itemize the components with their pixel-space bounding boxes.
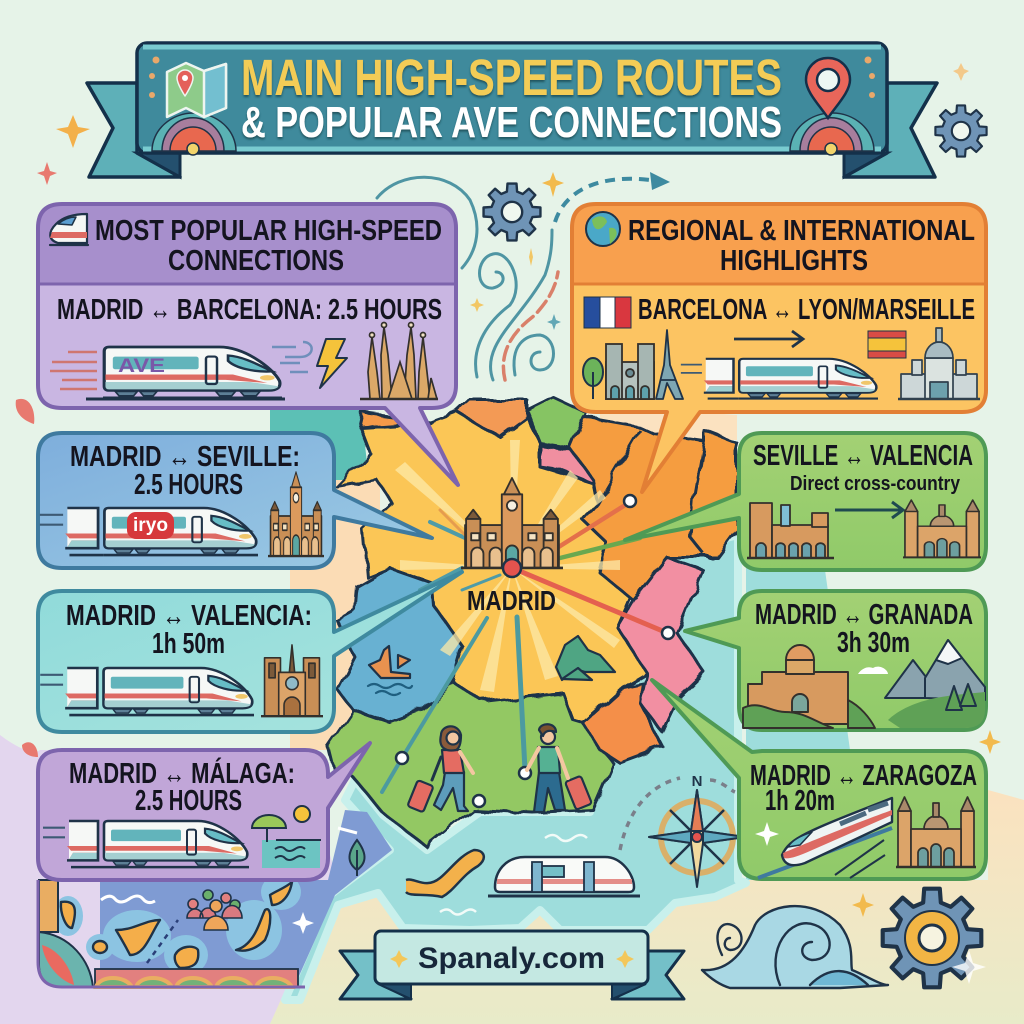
icon: Alhambra — [743, 645, 875, 728]
region: southern green — [328, 682, 613, 847]
train — [43, 821, 249, 867]
small swirl stars — [470, 248, 533, 312]
gear body — [883, 889, 981, 987]
decorative star small — [37, 162, 57, 185]
map hills icon — [556, 636, 615, 680]
train — [40, 668, 254, 715]
sparkle — [952, 950, 986, 984]
icon: mountains — [885, 640, 985, 728]
decorative star left — [56, 115, 90, 148]
icon: flag of France — [584, 297, 631, 328]
region: north-west — [360, 413, 430, 427]
route text: MADRID ↔ SEVILLE: — [70, 441, 300, 473]
tile column — [39, 880, 58, 932]
banner dots — [149, 56, 875, 98]
tree icon — [349, 840, 365, 876]
Madrid landmark — [461, 478, 563, 568]
heading line two: CONNECTIONS — [168, 245, 344, 277]
speed lines — [50, 352, 97, 389]
small star right edge — [979, 730, 1001, 754]
PANEL: regional and international highlights — [572, 204, 986, 492]
corner flower right — [790, 113, 874, 155]
duration: 3h 30m — [837, 627, 910, 659]
region: internal boundaries — [597, 430, 705, 555]
panel body with tail — [652, 680, 986, 879]
PANEL: Madrid to Valencia — [38, 572, 462, 732]
duration: 1h 50m — [152, 628, 225, 660]
corner flower left — [152, 113, 236, 155]
left ribbon tail — [87, 83, 180, 177]
Canary islands with halos — [53, 874, 301, 975]
icon: location pin — [806, 58, 850, 118]
traveller man with suitcase — [527, 724, 592, 812]
icon: domed hall — [898, 328, 980, 399]
route lines — [382, 495, 674, 807]
region: pink Rioja — [540, 445, 600, 483]
BOTTOM BANNER — [340, 931, 684, 999]
PANEL: Madrid to Granada — [685, 591, 986, 730]
wave marks — [440, 835, 587, 914]
decorative star centre — [542, 172, 564, 197]
duration: 2.5 HOURS — [134, 469, 243, 501]
sparkles — [390, 950, 634, 968]
icon: cloud — [858, 667, 888, 674]
iryo badge — [127, 512, 174, 539]
title line two: & POPULAR AVE CONNECTIONS — [241, 98, 782, 147]
Madrid marker — [503, 559, 521, 577]
traveller woman with suitcase — [407, 726, 473, 812]
region: large orange north-east — [570, 417, 737, 600]
icon: castle — [747, 503, 834, 558]
icon: Valencia cathedral — [261, 645, 323, 716]
map boat icon — [368, 646, 412, 695]
banner light trim — [143, 47, 881, 149]
hub — [919, 925, 945, 951]
region: central yellow — [337, 412, 647, 723]
region: western blue — [337, 568, 463, 723]
right ribbon tail — [844, 83, 937, 177]
decorative swirls — [377, 177, 558, 380]
AVE rail — [86, 398, 285, 400]
sparkle — [755, 822, 779, 846]
icon: folded map — [167, 63, 226, 117]
panel divider — [40, 282, 454, 286]
wind lines — [272, 342, 312, 372]
decorative gear top right — [935, 105, 987, 157]
icon: Seville tower — [268, 472, 324, 556]
corner flower — [39, 932, 93, 987]
banner body — [137, 43, 887, 153]
panel body with tail — [685, 591, 986, 730]
panel body with tail — [38, 743, 370, 880]
dashed curved arrow — [555, 172, 670, 222]
flower petals — [42, 945, 74, 985]
icon: Zaragoza basilica — [896, 797, 976, 867]
icon: basilica — [903, 500, 981, 557]
icon: lightning — [317, 339, 347, 388]
title line one: MAIN HIGH-SPEED ROUTES — [241, 49, 782, 106]
sea around the peninsula — [100, 535, 746, 1000]
arrow — [734, 331, 803, 347]
route text: MADRID ↔ VALENCIA: — [66, 600, 312, 632]
compass rose — [649, 773, 745, 887]
panel body with tail — [625, 433, 986, 570]
small star above wave — [852, 893, 874, 917]
panel body with tail — [572, 204, 986, 492]
tile strip with arches — [95, 969, 298, 987]
PANEL: most popular connections — [38, 204, 458, 485]
region: pink Valencia — [617, 557, 705, 733]
island near the coast — [406, 850, 484, 897]
region: basque green — [527, 397, 587, 448]
panel body with tail — [38, 572, 462, 732]
site name: Spanaly.com — [418, 942, 605, 975]
region: orange Murcia — [583, 683, 663, 763]
folds — [137, 153, 887, 177]
icon: tree — [583, 358, 603, 399]
route text: MADRID ↔ MÁLAGA: — [69, 758, 295, 790]
sparkle in the sea — [292, 912, 314, 934]
PANEL: Seville to Valencia — [625, 433, 986, 570]
heading line two: HIGHLIGHTS — [720, 245, 868, 277]
heading: MOST POPULAR HIGH-SPEED — [95, 215, 442, 247]
decorative star right — [953, 63, 969, 81]
bottom decorative wave — [702, 906, 888, 988]
right ribbon — [612, 951, 684, 999]
PANEL: Madrid to Seville — [38, 433, 432, 568]
lower-left tile frame — [38, 880, 305, 987]
Canary sea marks — [101, 828, 357, 963]
sun rays over Madrid — [395, 440, 620, 692]
icon: Eiffel Tower — [656, 330, 683, 399]
crowd icon — [187, 890, 242, 930]
left ribbon — [340, 951, 411, 999]
icon: beach and sun — [252, 806, 321, 868]
train — [40, 508, 258, 555]
duration: 2.5 HOURS — [135, 785, 242, 817]
small teal star — [547, 314, 561, 330]
map of Spain — [328, 397, 737, 847]
icon: small train — [50, 214, 88, 245]
region: north coast orange — [457, 400, 527, 437]
duration: 1h 20m — [765, 785, 835, 817]
panel divider — [574, 282, 984, 286]
folds — [378, 984, 646, 999]
iryo badge: iryo — [133, 515, 168, 536]
icon: flag of Spain — [868, 331, 906, 358]
arrow — [835, 502, 903, 518]
subtitle: Direct cross-country — [790, 473, 961, 495]
gold ring — [905, 911, 959, 965]
dashed map route — [620, 778, 735, 850]
bottom sea train icon — [488, 857, 640, 896]
decorative leaves at the left edge — [16, 399, 38, 757]
AVE train — [103, 347, 282, 398]
panel body with tail — [38, 204, 458, 485]
panel body with tail — [38, 433, 432, 568]
bottom decorative gear — [883, 889, 986, 987]
compass rose: N — [692, 773, 702, 790]
frame stroke — [38, 880, 305, 987]
route text: MADRID ↔ BARCELONA: 2.5 HOURS — [57, 294, 442, 326]
icon: Notre-Dame — [606, 344, 654, 399]
train — [681, 359, 878, 399]
icon: Sagrada Familia — [360, 322, 438, 399]
PANEL: Madrid to Malaga — [38, 743, 370, 880]
AVE label: AVE — [118, 356, 165, 377]
TITLE BANNER — [87, 43, 937, 177]
decorative gear centre — [484, 184, 540, 240]
icon: globe — [586, 212, 620, 246]
Madrid label: MADRID — [467, 585, 556, 616]
diagonal train — [758, 798, 892, 878]
plaque — [375, 931, 648, 984]
PANEL: Madrid to Zaragoza — [652, 680, 986, 879]
